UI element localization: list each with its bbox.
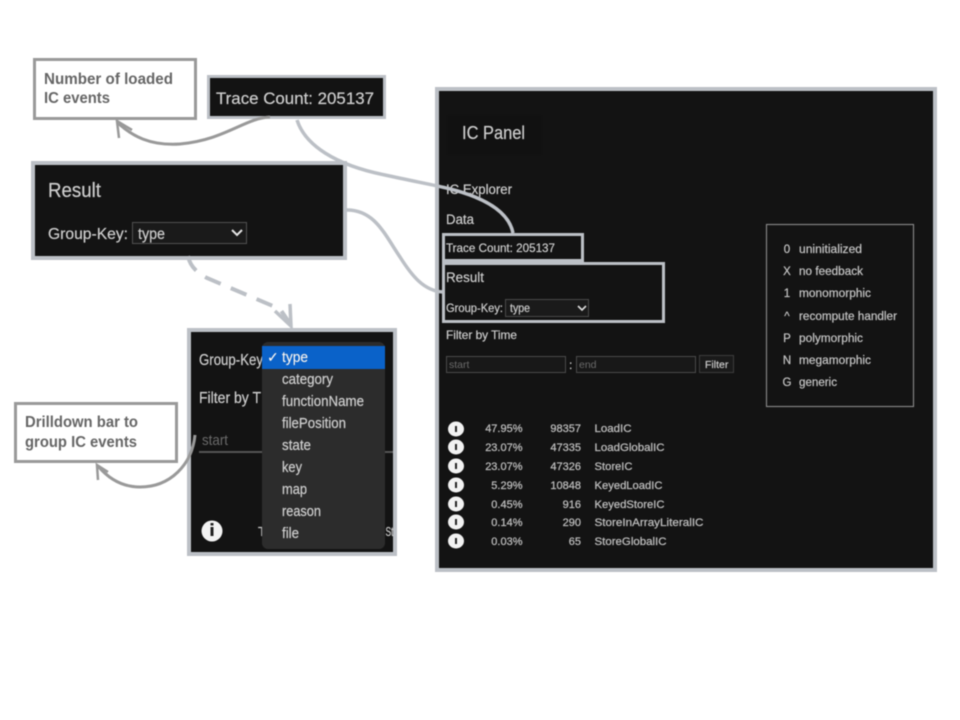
legend box: monomorphic xyxy=(799,288,871,300)
dropdown menu: type xyxy=(282,350,308,366)
callout: drilldown bar: group IC events xyxy=(25,434,137,451)
heading: IC Panel xyxy=(447,115,542,155)
arrow: trace count to callout xyxy=(117,117,270,144)
legend box: P xyxy=(783,333,791,345)
callout: drilldown bar xyxy=(16,404,176,462)
panel: dropdown zoom: Group-Key xyxy=(199,352,263,369)
callout: number of loaded IC events xyxy=(34,60,196,118)
dropdown menu: reason xyxy=(282,504,321,520)
panel: dropdown zoom: start xyxy=(202,433,228,449)
heading: IC Panel: IC Panel xyxy=(462,123,525,143)
panel: dropdown zoom: T xyxy=(258,524,266,539)
results table: 23.07% xyxy=(485,442,523,454)
connector: trace count to panel xyxy=(297,120,513,233)
results table: 98357 xyxy=(550,423,581,435)
legend box: megamorphic xyxy=(799,355,871,367)
legend box: polymorphic xyxy=(799,333,863,345)
legend box: 1 xyxy=(784,288,790,300)
legend box: ^ xyxy=(784,311,790,323)
results table: 47.95% xyxy=(485,423,523,435)
highlight: trace count xyxy=(444,234,582,260)
results table xyxy=(448,422,704,548)
results table: 10848 xyxy=(550,480,581,492)
dropdown menu: filePosition xyxy=(282,416,346,432)
results table: 0.45% xyxy=(491,499,523,511)
callout: number of loaded IC events: IC events xyxy=(44,90,110,107)
legend box: uninitialized xyxy=(799,244,862,256)
panel: trace count zoom: Trace Count: 205137 xyxy=(216,89,374,108)
legend box: generic xyxy=(799,377,837,389)
results table: 47326 xyxy=(550,461,581,473)
highlight: result group key: type xyxy=(510,303,530,315)
filter inputs: Filter xyxy=(705,359,729,371)
text: IC Explorer: IC Explorer xyxy=(446,182,512,197)
panel: result zoom: Group-Key: xyxy=(48,226,128,243)
panel: dropdown zoom xyxy=(189,330,395,554)
highlight: result group key: Result xyxy=(446,270,484,285)
panel: IC Panel screenshot xyxy=(437,89,935,570)
results table: KeyedStoreIC xyxy=(594,499,665,511)
highlight: trace count: Trace Count: 205137 xyxy=(446,241,555,255)
results table: StoreGlobalIC xyxy=(594,536,667,548)
results table: 23.07% xyxy=(485,461,523,473)
callout: number of loaded IC events: Number of loaded xyxy=(44,71,173,88)
dropdown menu: file xyxy=(282,526,299,542)
results table: 290 xyxy=(563,517,581,529)
results table: 5.29% xyxy=(491,480,523,492)
panel: result zoom: Result xyxy=(48,180,101,202)
results table: 65 xyxy=(569,536,581,548)
filter inputs: start xyxy=(449,359,470,371)
panel: result zoom: type xyxy=(138,226,165,243)
legend box: X xyxy=(783,266,791,278)
callout: drilldown bar: Drilldown bar to xyxy=(25,414,138,431)
legend box: 0 xyxy=(784,244,790,256)
results table: KeyedLoadIC xyxy=(594,480,663,492)
results table: StoreInArrayLiteralIC xyxy=(594,517,704,529)
legend box xyxy=(766,224,914,406)
text: Filter by Time: Filter by Time xyxy=(446,328,517,342)
results table: 47335 xyxy=(550,442,581,454)
dropdown menu: category xyxy=(282,372,334,388)
results table: 0.14% xyxy=(491,517,523,529)
connector: dashed result to dropdown xyxy=(188,256,291,326)
highlight: result group key xyxy=(444,264,664,322)
panel: dropdown zoom: Filter by T xyxy=(199,390,261,407)
results table: 916 xyxy=(563,499,581,511)
results table: StoreIC xyxy=(594,461,633,473)
results table: 0.03% xyxy=(491,536,523,548)
dropdown menu: map xyxy=(282,482,307,498)
legend box: N xyxy=(783,355,791,367)
panel: dropdown zoom: St xyxy=(386,524,394,539)
dropdown menu: state xyxy=(282,438,311,454)
results table: LoadGlobalIC xyxy=(594,442,665,454)
results table: LoadIC xyxy=(594,423,632,435)
panel: result zoom xyxy=(33,163,345,258)
dropdown menu: ✓ xyxy=(267,349,279,365)
connector: result to panel xyxy=(347,210,443,292)
panel: trace count zoom xyxy=(208,76,384,118)
dropdown menu xyxy=(262,342,385,549)
dropdown menu: key xyxy=(282,460,303,476)
text: Data: Data xyxy=(446,212,474,227)
legend box: G xyxy=(783,377,792,389)
filter inputs xyxy=(446,356,734,372)
filter inputs: : xyxy=(569,358,572,372)
arrow: drilldown to callout xyxy=(97,435,195,487)
legend box: recompute handler xyxy=(799,311,897,323)
filter inputs: end xyxy=(579,359,597,371)
dropdown menu: functionName xyxy=(282,394,364,410)
highlight: result group key: Group-Key: xyxy=(446,301,503,315)
legend box: no feedback xyxy=(799,266,863,278)
